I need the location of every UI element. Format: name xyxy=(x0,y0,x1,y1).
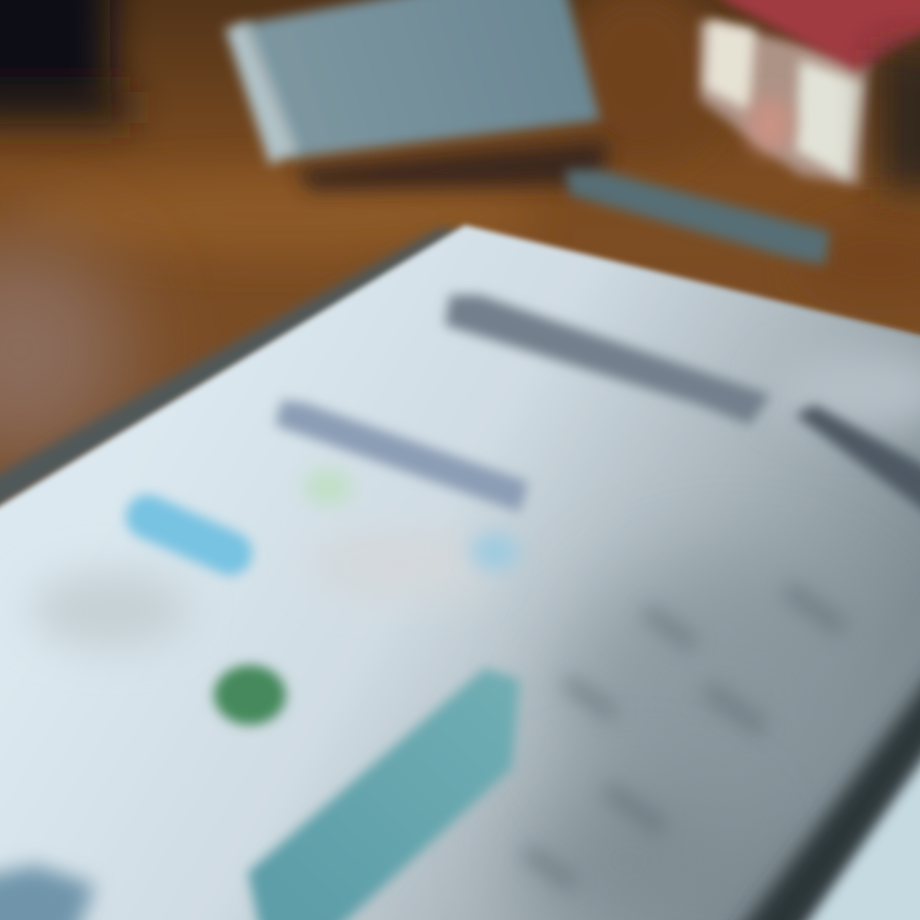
house windows xyxy=(705,20,862,180)
pen on desk xyxy=(565,170,830,265)
second heading bar xyxy=(275,400,528,512)
blurred text marks on page xyxy=(521,582,849,892)
light green tag xyxy=(304,470,352,504)
dark document binding bottom right xyxy=(725,650,920,920)
miniature house xyxy=(690,0,920,190)
small blue tag xyxy=(471,533,519,571)
green status circle xyxy=(214,665,286,725)
teal highlighted block xyxy=(248,668,520,920)
blue pill label xyxy=(119,488,259,582)
document edge shadow xyxy=(0,228,470,525)
dark object top left xyxy=(0,0,130,125)
top heading bar xyxy=(445,295,920,530)
blue mark bottom left xyxy=(0,865,95,920)
laptop / tablet device xyxy=(225,0,610,190)
document page xyxy=(0,225,920,920)
second page corner bottom right xyxy=(790,725,920,920)
